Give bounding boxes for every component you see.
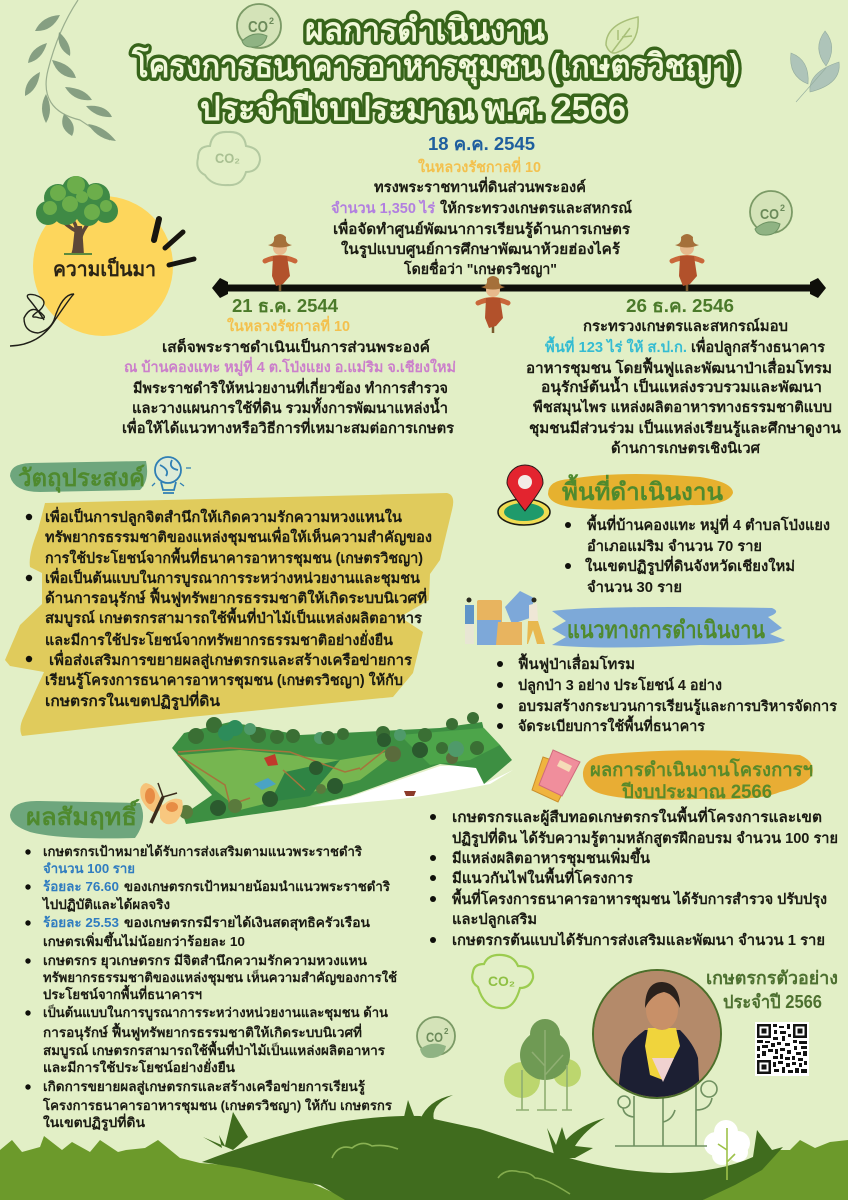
heading: results: ปีงบประมาณ 2566	[621, 781, 772, 803]
results list: เกษตรกรต้นแบบได้รับการส่งเสริมและพัฒนา จำนวน 1 ราย	[452, 931, 825, 949]
icon: scarecrow center	[478, 276, 508, 333]
text block: 26 ธ.ค. 2546: ชุมชนมีส่วนร่วม เป็นแหล่งเรียนรู้และศึกษาดูงาน	[529, 418, 841, 437]
guideline list: อบรมสร้างกระบวนการเรียนรู้และการบริหารจัดการ	[518, 698, 837, 715]
text block: 21 ธ.ค. 2544: ในหลวงรัชกาลที่ 10	[227, 315, 350, 335]
results list text: เป็นต้นแบบในการบูรณาการระหว่างหน่วยงานและชุมชน ด้าน	[43, 1003, 388, 1021]
icon: CO2 cloud	[197, 132, 260, 185]
heading: results: ผลการดำเนินงานโครงการฯ	[590, 758, 813, 781]
results list text: จำนวน 100 ราย	[43, 861, 135, 876]
location list: ในเขตปฏิรูปที่ดินจังหวัดเชียงใหม่	[585, 555, 795, 575]
results list text: การอนุรักษ์ ฟื้นฟูทรัพยากรธรรมชาติให้เกิดระบบนิเวศที่	[43, 1022, 362, 1041]
icon: line trees	[615, 1085, 712, 1146]
results list text: ทรัพยากรธรรมชาติของแหล่งชุมชน เห็นความสำคัญของการใช้	[43, 968, 397, 986]
text block: 26 ธ.ค. 2546: อนุรักษ์ต้นน้ำ เป็นแหล่งรวบรวมและพัฒนา	[541, 376, 822, 396]
objective list text: และมีการใช้ประโยชน์จากทรัพยากรธรรมชาติอย่างยั่งยืน	[45, 629, 393, 649]
text block: 26 ธ.ค. 2546: อาหารชุมชน โดยฟื้นฟูและพัฒนาป่าเสื่อมโทรม	[526, 357, 832, 377]
icon: tree	[36, 176, 118, 255]
text block: 18 ค.ค. 2545: ในหลวงรัชกาลที่ 10	[418, 156, 541, 176]
decoration: leaf branch top left	[25, 0, 116, 141]
text block: 18 ค.ค. 2545: ทรงพระราชทานที่ดินส่วนพระองค์	[374, 176, 586, 196]
text block: 26 ธ.ค. 2546: พืชสมุนไพร แหล่งผลิตอาหารทางธรรมชาติแบบ	[533, 398, 832, 416]
results list text: ประโยชน์จากพื้นที่ธนาคารฯ	[43, 984, 202, 1002]
icon: white flower tree	[704, 1120, 750, 1180]
heading: model farmer: เกษตรกรตัวอย่าง	[706, 968, 838, 988]
icon: scarecrow right	[672, 234, 702, 291]
heading: guidelines	[552, 607, 785, 648]
heading: model farmer	[706, 968, 838, 1012]
heading: results	[10, 799, 143, 838]
icon: CO2 cloud bright	[472, 955, 533, 1008]
decoration: blue leaves top right	[791, 31, 839, 102]
photo: model farmer	[590, 970, 724, 1100]
background shape: yellow brush	[5, 493, 453, 736]
results list	[430, 806, 838, 949]
icon: CO2 badge right	[750, 191, 792, 235]
icon: CO2 cloud: CO₂	[215, 150, 240, 166]
results list: มีแหล่งผลิตอาหารชุมชนเพิ่มขึ้น	[452, 847, 650, 867]
text block: 21 ธ.ค. 2544: ณ บ้านคองแทะ หมู่ที่ 4 ต.โป่งแยง อ.แม่ริม จ.เชียงใหม่	[124, 356, 456, 376]
text block: 18 ค.ค. 2545: โดยชื่อว่า "เกษตรวิชญา"	[403, 258, 557, 278]
results list: ปฏิรูปที่ดิน ได้รับความรู้ตามหลักสูตรฝึกอบรม จำนวน 100 ราย	[452, 827, 838, 847]
text block: 21 ธ.ค. 2544: เสด็จพระราชดำเนินเป็นการส่วนพระองค์	[162, 337, 430, 356]
guideline list: จัดระเบียบการใช้พื้นที่ธนาคาร	[518, 715, 705, 735]
results list text: โครงการธนาคารอาหารชุมชน (เกษตรวิชญา) ให้กับ เกษตรกร	[42, 1097, 392, 1114]
results list text: เกษตรกร ยุวเกษตรกร มีจิตสำนึกความรักความหวงแหน	[43, 953, 367, 969]
results list: พื้นที่โครงการธนาคารอาหารชุมชน ได้รับการสำรวจ ปรับปรุง	[452, 888, 827, 908]
results list: เกษตรกรและผู้สืบทอดเกษตรกรในพื้นที่โครงการและเขต	[452, 806, 822, 826]
objective list text: เพื่อเป็นการปลูกจิตสำนึกให้เกิดความรักความหวงแหนใน	[45, 506, 402, 526]
icon: tree group	[504, 1019, 581, 1110]
icon: leaf top	[606, 17, 638, 53]
panel: operating area	[498, 465, 830, 596]
results list text	[41, 843, 397, 1131]
icon: puzzle with people	[465, 591, 545, 645]
guideline list: ฟื้นฟูป่าเสื่อมโทรม	[518, 653, 635, 673]
results list text: และมีการใช้ประโยชน์อย่างยั่งยืน	[43, 1058, 235, 1075]
objective list text: เกษตรกรในเขตปฏิรูปที่ดิน	[45, 690, 220, 710]
text block: 21 ธ.ค. 2544: 21 ธ.ค. 2544	[232, 296, 338, 316]
text block: 21 ธ.ค. 2544: มีพระราชดำริให้หน่วยงานที่เกี่ยวข้อง ทำการสำรวจ	[133, 377, 448, 397]
results list text: ของเกษตรกรมีรายได้เงินสดสุทธิครัวเรือน	[124, 914, 370, 931]
panel: guidelines	[465, 591, 837, 735]
icon: CO2 badge lower: CO	[426, 1029, 443, 1045]
text block: 18 ค.ค. 2545: 18 ค.ค. 2545	[428, 134, 535, 154]
panel: results	[10, 783, 397, 1131]
heading: model farmer: ประจำปี 2566	[723, 992, 822, 1012]
objective list text: เพื่อเป็นต้นแบบในการบูรณาการระหว่างหน่วยงานและชุมชน	[45, 567, 420, 587]
results list text: เกษตรเพิ่มขึ้นไม่น้อยกว่าร้อยละ 10	[43, 931, 245, 949]
text block: 26 ธ.ค. 2546: กระทรวงเกษตรและสหกรณ์มอบ	[583, 317, 788, 335]
heading: objectives: วัตถุประสงค์	[18, 464, 145, 494]
icon: scarecrow left	[265, 234, 295, 291]
icon: CO2 badge top: 2	[269, 16, 274, 26]
text block: 18 ค.ค. 2545: ให้กระทรวงเกษตรและสหกรณ์	[440, 199, 633, 217]
objective list text: เพื่อส่งเสริมการขยายผลสู่เกษตรกรและสร้างเครือข่ายการ	[49, 649, 412, 669]
panel: history heading circle	[33, 176, 194, 336]
objective list text	[45, 506, 432, 710]
icon: notebooks	[532, 750, 580, 802]
text block: 21 ธ.ค. 2544: เพื่อให้ได้แนวทางหรือวิธีการที่เหมาะสมต่อการเกษตร	[122, 417, 454, 437]
results list text: ร้อยละ 25.53	[43, 915, 119, 930]
icon: CO2 badge lower: 2	[444, 1027, 449, 1036]
results list text: สมบูรณ์ เกษตรกรสามารถใช้พื้นที่ป่าไม้เป็นแหล่งผลิตอาหาร	[43, 1040, 385, 1059]
results list text: เกษตรกรเป้าหมายได้รับการส่งเสริมตามแนวพระราชดำริ	[43, 843, 362, 859]
heading: results: ผลสัมฤทธิ์	[26, 799, 140, 831]
text block: 26 ธ.ค. 2546: ด้านการเกษตรเชิงนิเวศ	[611, 440, 761, 457]
panel: objectives	[5, 457, 453, 736]
icon: CO2 badge top	[237, 4, 281, 48]
bullets	[26, 514, 32, 662]
icon: light bulb globe	[152, 457, 191, 493]
objective list text: สมบูรณ์ เกษตรกรสามารถใช้พื้นที่ป่าไม้เป็นแหล่งผลิตอาหาร	[45, 607, 422, 627]
guideline list	[497, 653, 837, 735]
text block: 21 ธ.ค. 2544: และวางแผนการใช้ที่ดิน รวมทั้งการพัฒนาแหล่งน้ำ	[132, 397, 448, 417]
heading: results	[583, 750, 813, 803]
bullets	[25, 849, 31, 1090]
heading: operating area: พื้นที่ดำเนินงาน	[562, 473, 724, 506]
objective list text: ด้านการอนุรักษ์ ฟื้นฟูทรัพยากรธรรมชาติให้เกิดระบบนิเวศที่	[45, 587, 427, 607]
text block: 18 ค.ค. 2545: ในรูปแบบศูนย์การศึกษาพัฒนาห้วยฮ่องไคร้	[341, 240, 620, 258]
text block: 18 ค.ค. 2545: จำนวน 1,350 ไร่	[331, 199, 435, 217]
text block: 26 ธ.ค. 2546: 26 ธ.ค. 2546	[626, 296, 734, 316]
text block: 26 ธ.ค. 2546: พื้นที่ 123 ไร่ ให้ ส.ป.ก.	[545, 336, 687, 356]
title	[131, 11, 740, 127]
text block: 26 ธ.ค. 2546: เพื่อปลูกสร้างธนาคาร	[691, 336, 825, 356]
location list: จำนวน 30 ราย	[587, 579, 682, 596]
results list text: ไปปฏิบัติและได้ผลจริง	[41, 896, 170, 913]
text block: 26 ธ.ค. 2546	[526, 296, 841, 457]
results list: และปลูกเสริม	[452, 911, 537, 928]
heading: operating area	[548, 473, 733, 509]
title: โครงการธนาคารอาหารชุมชน (เกษตรวิชญา)	[131, 46, 740, 87]
icon: accent strokes	[154, 219, 194, 265]
icon: CO2 badge right: 2	[780, 203, 785, 213]
location list: อำเภอแม่ริม จำนวน 70 ราย	[587, 538, 762, 555]
timeline bar	[212, 234, 826, 333]
text block: 21 ธ.ค. 2544	[122, 296, 456, 437]
QR code	[755, 1022, 809, 1076]
text block: 18 ค.ค. 2545	[331, 134, 633, 278]
icon: CO2 badge right: CO	[760, 206, 779, 223]
objective list text: การใช้ประโยชน์จากพื้นที่ธนาคารอาหารชุมชน (เกษตรวิชญา)	[45, 547, 423, 567]
objective list text: ทรัพยากรธรรมชาติของแหล่งชุมชนเพื่อให้เห็นความสำคัญของ	[45, 526, 432, 546]
icon: butterfly	[140, 783, 183, 824]
grass foreground	[0, 1095, 848, 1200]
objective list text: เรียนรู้โครงการธนาคารอาหารชุมชน (เกษตรวิชญา) ให้กับ	[45, 671, 403, 689]
results list text: เกิดการขยายผลสู่เกษตรกรและสร้างเครือข่ายการเรียนรู้	[43, 1079, 365, 1095]
results list: มีแนวกันไฟในพื้นที่โครงการ	[452, 867, 633, 887]
heading: history: ความเป็นมา	[53, 256, 156, 281]
title: ประจำปีงบประมาณ พ.ศ. 2566	[200, 90, 626, 127]
icon: CO2 badge top: CO	[248, 19, 268, 36]
title: ผลการดำเนินงาน	[305, 11, 545, 48]
map illustration	[172, 712, 513, 824]
icon: CO2 cloud bright: CO₂	[488, 973, 515, 989]
guideline list: ปลูกป่า 3 อย่าง ประโยชน์ 4 อย่าง	[518, 676, 722, 694]
icon: location pin	[498, 465, 550, 525]
location list: พื้นที่บ้านคองแทะ หมู่ที่ 4 ตำบลโป่งแยง	[587, 514, 830, 534]
text block: 18 ค.ค. 2545: เพื่อจัดทำศูนย์พัฒนาการเรียนรู้ด้านการเกษตร	[333, 218, 630, 238]
results list text: ในเขตปฏิรูปที่ดิน	[43, 1113, 145, 1131]
icon: doodle butterfly	[10, 294, 74, 346]
results list text: ร้อยละ 76.60	[43, 879, 119, 894]
icon: CO2 badge lower	[417, 1017, 455, 1058]
heading: guidelines: แนวทางการดำเนินงาน	[567, 617, 765, 644]
location list	[565, 514, 830, 596]
panel: results 2566	[430, 750, 838, 949]
results list text: ของเกษตรกรเป้าหมายน้อมนำแนวพระราชดำริ	[124, 879, 390, 894]
